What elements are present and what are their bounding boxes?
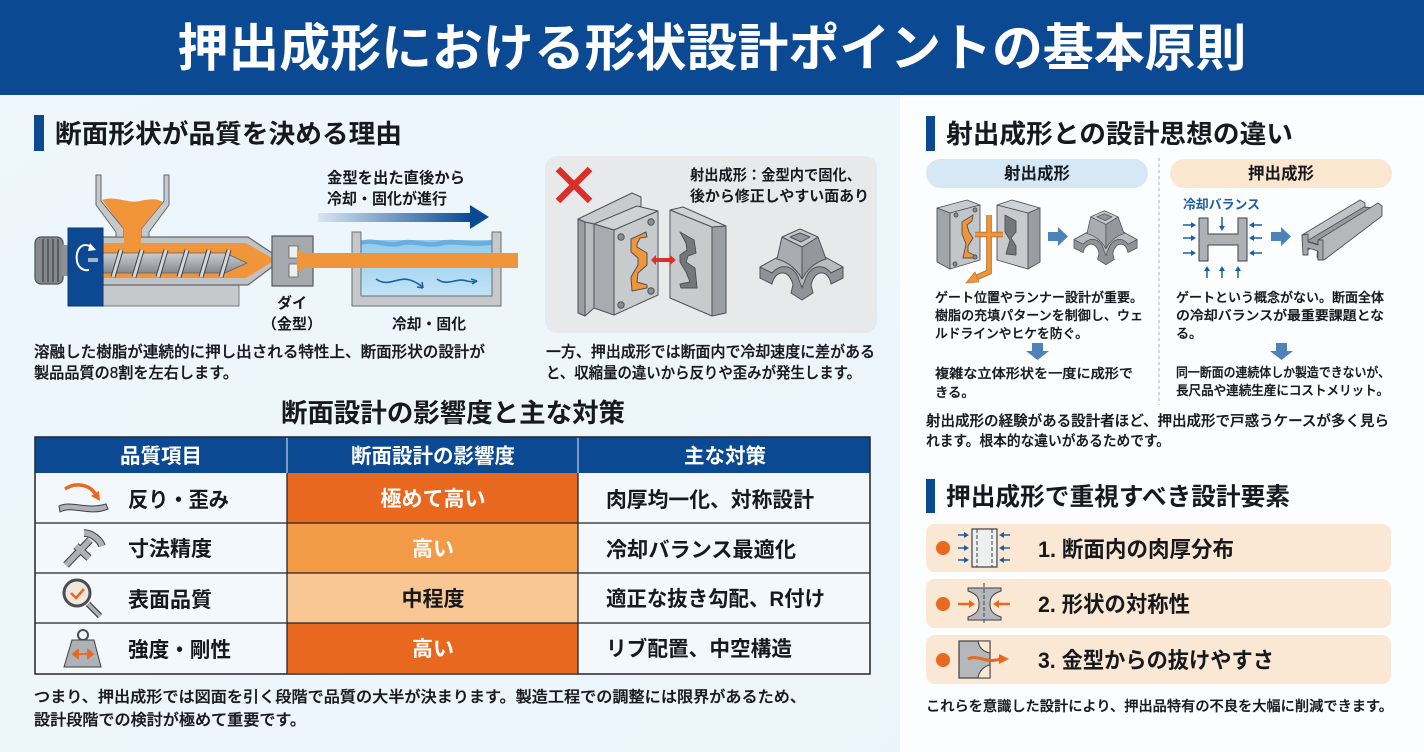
result: 複雑な立体形状を一度に成形で [935,365,1133,381]
arrow [1271,227,1291,246]
item: symmetry: 2. 形状の対称性 [1038,592,1190,617]
cooling tank [352,232,501,306]
panel caption: 射出成形：金型内で固化、 [690,166,861,184]
result: 長尺品や連続生産にコストメリット。 [1176,383,1389,398]
description: ゲートという概念がない。断面全体 [1176,290,1384,305]
pill label [1170,159,1392,188]
column: extrusion [1170,159,1392,398]
heading: design elements: 押出成形で重視すべき設計要素 [946,483,1290,511]
result: 同一断面の連続体しか製造できないが、 [1176,365,1390,380]
barrel and melt [103,237,272,285]
label: die: ダイ [277,294,307,312]
title banner [0,0,1424,95]
label: cooling balance: 冷却バランス [1183,197,1260,212]
item: ejection [926,635,1391,684]
row: strength [64,630,792,667]
table header [35,437,870,473]
text: table conclusion [34,687,806,729]
drive block [68,228,103,306]
panel caption: 後から修正しやすい面あり [690,187,869,205]
mold halves [578,193,726,316]
description: の冷却バランスが最重要課題とな [1176,308,1384,323]
icon: red cross [558,169,590,201]
cooling arrows [1183,217,1262,278]
result: きる。 [935,385,975,400]
text: designer note [926,412,1389,450]
product: molded part [760,229,843,300]
product: small molded part [1074,211,1137,265]
base [100,285,239,306]
heading: why cross-section determines quality: 断面形状が品質を決める理由 [55,119,402,149]
result [1176,365,1390,398]
description: 樹脂の充填パターンを制御し、ウェ [935,308,1143,323]
pill label: 押出成形 [1248,163,1314,183]
item: ejection: 3. 金型からの抜けやすさ [1038,648,1274,673]
table header: 主な対策 [684,445,766,468]
screw [103,250,247,277]
description: る。 [1176,326,1202,341]
text: table conclusion: 設計段階での検討が極めて重要です。 [34,710,306,729]
row: surface quality [64,580,825,616]
impact cells [287,473,578,673]
text: designer note: 射出成形の経験がある設計者ほど、押出成形で戸惑うケースが多く見ら [926,412,1389,430]
text: extrusion explanation: 溶融した樹脂が連続的に押し出される特性上、断面形状の設計が [34,343,485,361]
result [935,365,1133,400]
text: closing note: これらを意識した設計により、押出品特有の不良を大幅に削減できます。 [926,698,1393,715]
row: warpage: 反り・歪み [128,489,229,512]
panel caption [690,166,869,205]
description [935,290,1143,341]
row: warpage: 肉厚均一化、対称設計 [606,489,814,512]
row: dimensional accuracy [66,533,796,565]
panel: injection molding comparison [545,156,877,333]
H profile [1199,218,1247,261]
row: warpage: 極めて高い [380,488,486,511]
process arrow [318,205,489,229]
row: strength: 高い [412,638,454,661]
text: extrusion explanation [34,343,485,382]
extruded profile [297,250,518,272]
description [1176,290,1384,341]
item: wall thickness [926,524,1391,572]
heading: impact table: 断面設計の影響度と主な対策 [281,398,625,428]
row: dimensional accuracy: 寸法精度 [128,538,212,561]
row: surface quality: 表面品質 [128,589,212,612]
row: strength: 強度・剛性 [128,639,231,662]
diagram: extrusion line [35,169,518,333]
row: surface quality: 適正な抜き勾配、R付け [606,588,825,611]
runner [966,215,1003,283]
text: table conclusion: つまり、押出成形では図面を引く段階で品質の大半が決まります。製造工程での調整には限界があるため、 [34,687,806,706]
text: cooling difference explanation: と、収縮量の違いから反りや歪みが発生します。 [546,364,861,382]
down arrow [1026,343,1049,360]
hopper [96,175,169,244]
table header: 断面設計の影響度 [351,445,515,468]
text: designer note: れます。根本的な違いがあるためです。 [926,432,1170,450]
table: quality impact [35,437,870,674]
item: symmetry [926,579,1391,628]
description: ゲート位置やランナー設計が重要。 [935,290,1143,305]
extruded beam [1302,200,1382,260]
water flow arrows [376,279,477,288]
item: wall thickness: 1. 断面内の肉厚分布 [1038,537,1234,562]
row: strength: リブ配置、中空構造 [606,637,792,661]
text: cooling difference explanation: 一方、押出成形では断面内で冷却速度に差がある [546,343,875,361]
pill label [926,159,1148,188]
label: die [262,294,322,333]
heading: design philosophy difference: 射出成形との設計思想の違い [946,119,1293,149]
mold with runner [937,200,1040,269]
title banner: 押出成形における形状設計ポイントの基本原則 [178,20,1246,77]
label: cooling progress: 金型を出た直後から [327,169,465,187]
text: cooling difference explanation [546,343,875,382]
label: cooling: 冷却・固化 [392,316,466,333]
down arrow [1270,343,1293,360]
die [272,236,313,286]
row: dimensional accuracy: 冷却バランス最適化 [606,539,796,562]
label: cooling progress [327,169,465,208]
label: die: （金型） [262,315,322,333]
description: ルドラインやヒケを防ぐ。 [935,326,1088,341]
label: cooling progress: 冷却・固化が進行 [327,190,447,208]
text: extrusion explanation: 製品品質の8割を左右します。 [34,364,238,382]
row: surface quality: 中程度 [402,588,464,611]
table header: 品質項目 [120,445,202,468]
row: warpage [59,485,814,512]
pill label: 射出成形 [1004,163,1070,183]
row: dimensional accuracy: 高い [412,538,454,561]
column: injection molding [926,159,1148,400]
red double arrow [651,255,676,265]
arrow [1048,227,1068,246]
motor knob [35,237,68,284]
